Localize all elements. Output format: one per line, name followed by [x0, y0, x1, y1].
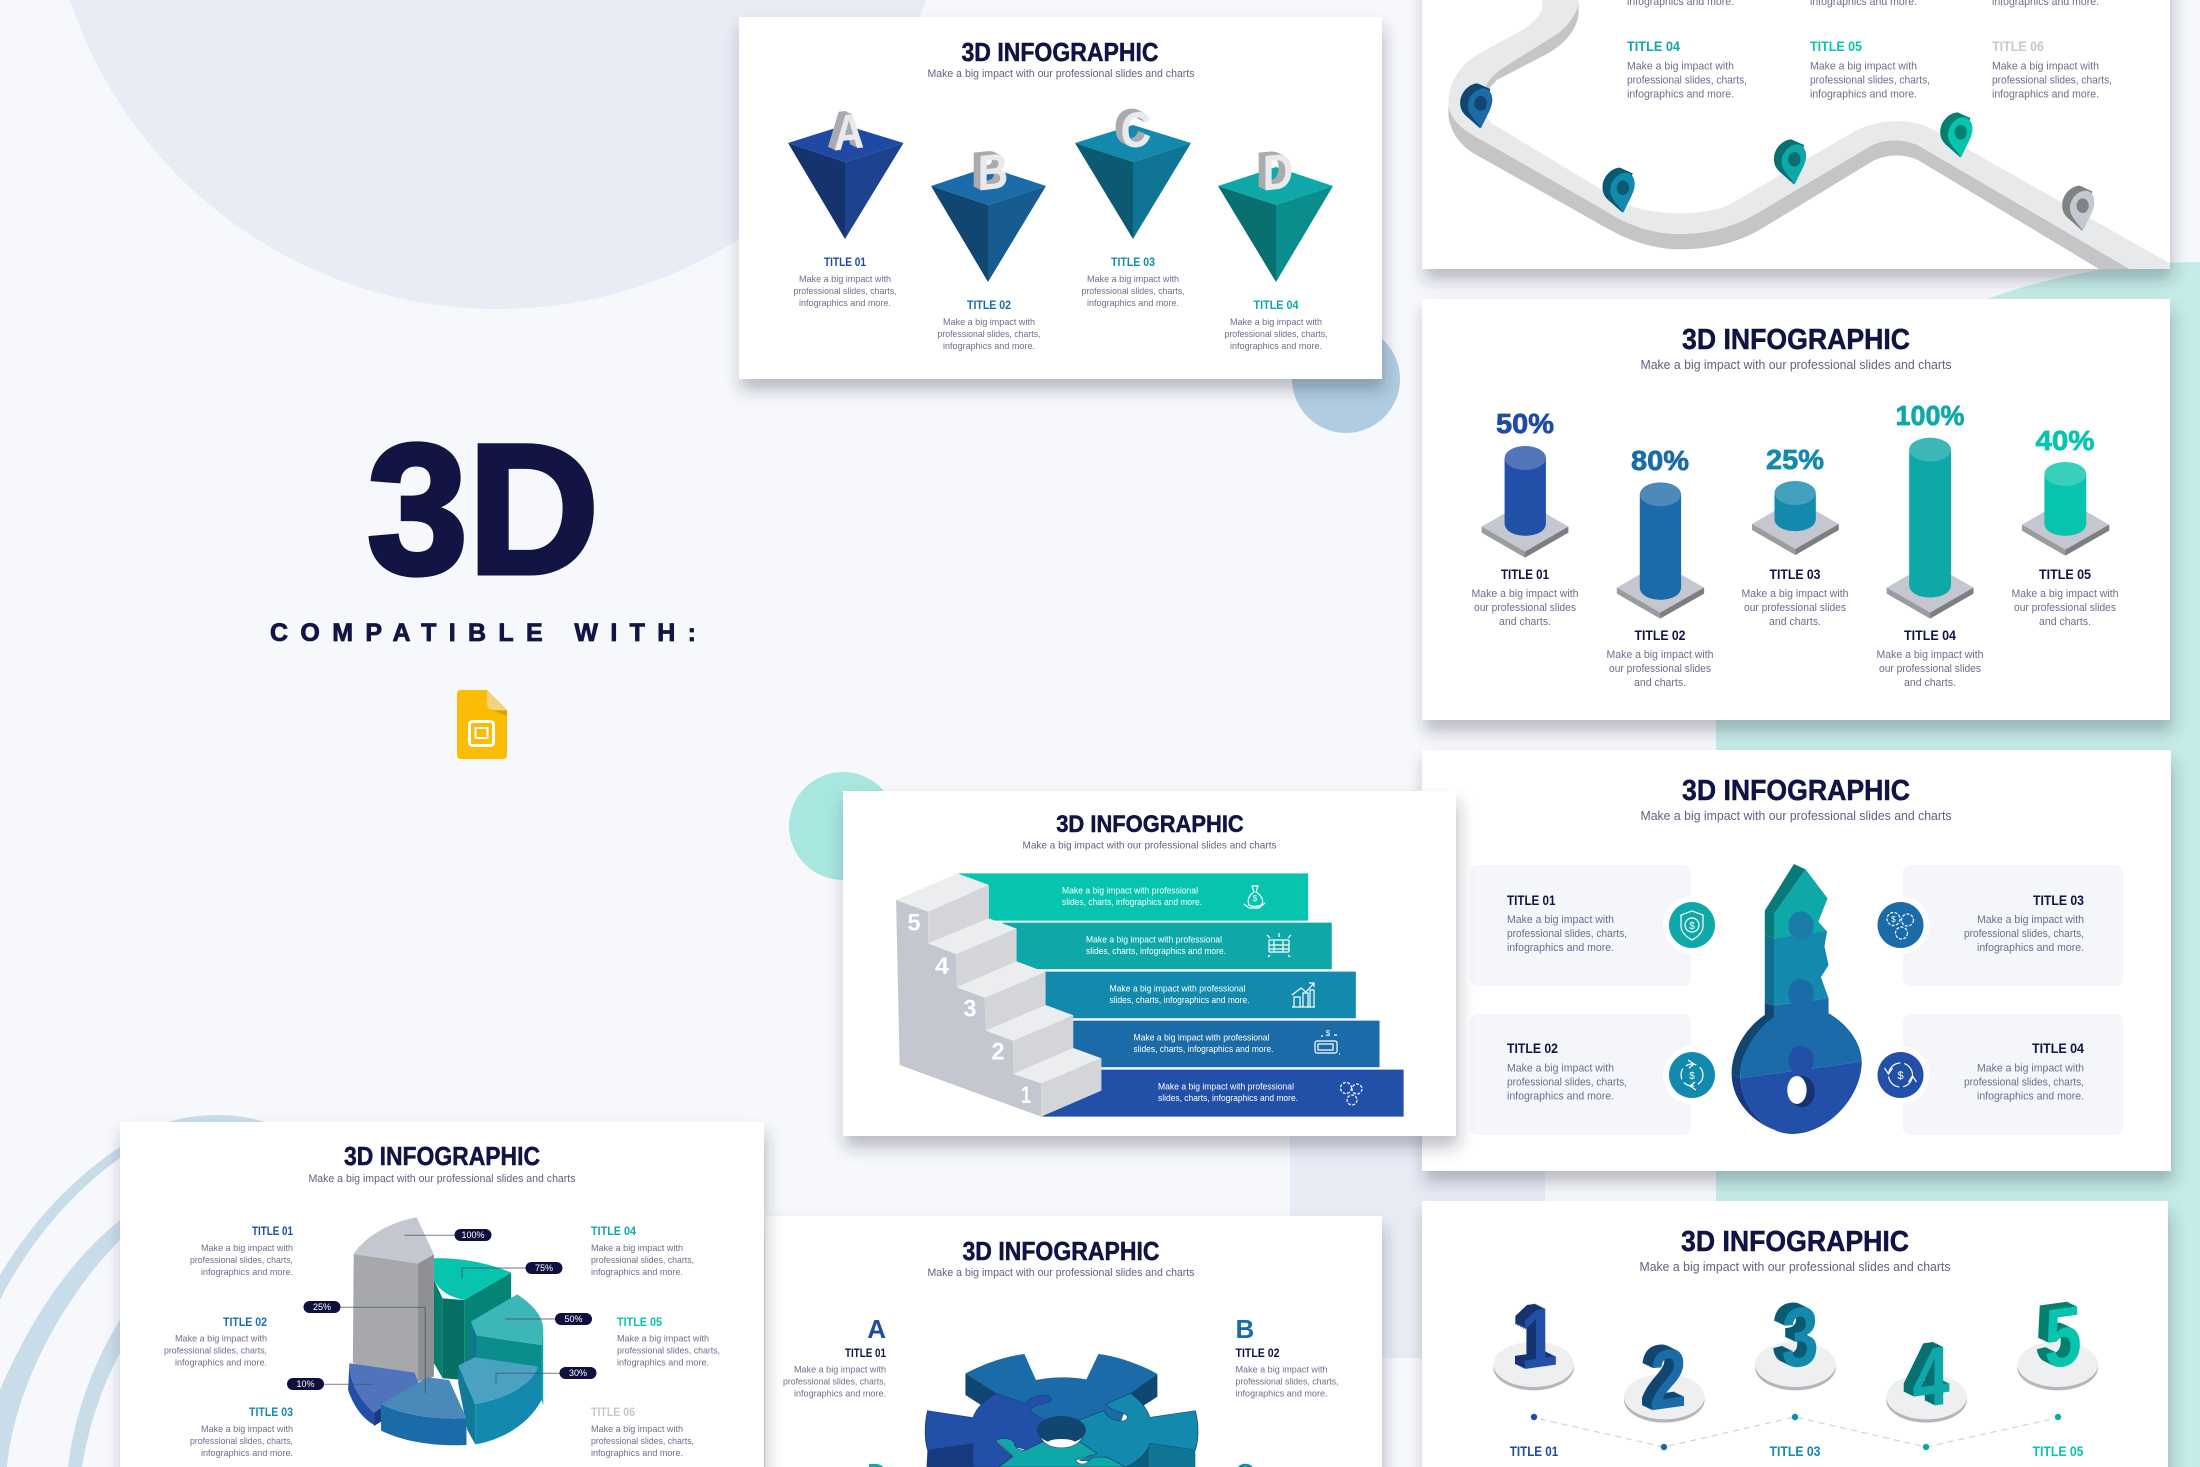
step numbers: 4	[935, 953, 950, 980]
segment: dark blue	[348, 1363, 419, 1426]
text: title 03	[1082, 255, 1184, 309]
piece: bottom	[997, 1439, 1125, 1467]
cylinder 50%	[1482, 446, 1568, 558]
bar 5	[959, 873, 1308, 921]
text: title 03: infographics and more.	[1087, 298, 1179, 309]
bottom titles: TITLE 05	[2032, 1443, 2084, 1459]
text: title 04	[591, 1224, 694, 1278]
block A: Make a big impact with	[794, 1364, 886, 1376]
text: title 01: infographics and more.	[799, 298, 891, 309]
text: title 01: TITLE 01	[824, 255, 866, 269]
bar text 1: slides, charts, infographics and more.	[1158, 1093, 1298, 1104]
text: title 04: Make a big impact with	[1627, 60, 1734, 72]
panel: puzzle gear slide	[765, 1216, 1382, 1467]
subheading: Make a big impact with our professional slides and charts	[1022, 840, 1276, 852]
heading: 3D INFOGRAPHIC	[1682, 324, 1910, 356]
text: title 02: TITLE 02	[223, 1315, 267, 1329]
segment: gray	[353, 1217, 434, 1382]
panel: key slide	[1422, 750, 2171, 1171]
text: title 01	[794, 255, 896, 309]
text: title 05	[2012, 566, 2118, 628]
text: title 01	[1472, 566, 1578, 628]
centre hole	[1037, 1416, 1086, 1446]
percent values: 40%	[2036, 425, 2095, 456]
bar text 2	[1134, 1032, 1274, 1055]
text: title 01: TITLE 01	[1507, 892, 1556, 908]
platforms	[1493, 1342, 2098, 1423]
main title: 3D: 3D	[367, 407, 599, 613]
percent values: 80%	[1631, 445, 1689, 476]
text: title 02	[1606, 627, 1714, 689]
text: title 02: TITLE 02	[1507, 1040, 1558, 1056]
block B: TITLE 02	[1236, 1346, 1280, 1360]
text: title 05	[1810, 38, 1930, 100]
text: title 06: professional slides, charts,	[591, 1436, 694, 1447]
text: title 04: professional slides, charts,	[591, 1255, 694, 1266]
pin 3	[1774, 139, 1806, 184]
icon: gears	[1872, 896, 1930, 954]
text: title 04: infographics and more.	[591, 1267, 683, 1278]
text: title 01: professional slides, charts,	[794, 286, 896, 297]
text: title 04: Make a big impact with	[1977, 1062, 2084, 1074]
3D number 1: 1	[1520, 1288, 1558, 1388]
block A: TITLE 01	[845, 1346, 886, 1360]
subheading: Make a big impact with our professional slides and charts	[928, 68, 1195, 80]
pin 2	[1602, 168, 1635, 213]
icon: shield	[1663, 896, 1721, 954]
heading: 3D INFOGRAPHIC	[1681, 1226, 1909, 1258]
block B: Make a big impact with	[1236, 1364, 1328, 1376]
text: title 05: Make a big impact with	[2012, 588, 2118, 600]
pyramid D	[1218, 167, 1333, 282]
text: title 05: our professional slides	[2014, 602, 2116, 614]
heading: 3D INFOGRAPHIC	[962, 37, 1159, 67]
3D letter D: D	[1263, 142, 1293, 201]
bar text 3	[1110, 984, 1250, 1006]
text: title 04	[1964, 1040, 2084, 1102]
block B: professional slides, charts,	[1236, 1376, 1338, 1388]
text: title 03: TITLE 03	[2033, 892, 2084, 908]
heading: 3D INFOGRAPHIC	[1056, 811, 1244, 838]
subheading: Make a big impact with our professional slides and charts	[1640, 357, 1952, 372]
text: title 03: Make a big impact with	[1742, 588, 1848, 600]
text: title 02: Make a big impact with	[1507, 1062, 1614, 1074]
percent values: 25%	[1766, 444, 1824, 475]
text: title 01: professional slides, charts,	[190, 1255, 293, 1266]
bar text 2: slides, charts, infographics and more.	[1134, 1044, 1274, 1055]
text: title 04	[1627, 38, 1747, 100]
background shape: mint circle	[789, 772, 897, 880]
step numbers: 1	[1021, 1082, 1031, 1109]
text: title 02	[164, 1315, 267, 1368]
percent values	[1496, 400, 2095, 476]
icon: shield: $	[1689, 921, 1695, 932]
bottom titles	[1510, 1443, 2084, 1459]
3D key	[1732, 864, 1862, 1134]
text: top cropped lines	[1627, 0, 2099, 8]
bar text 1: Make a big impact with professional	[1158, 1082, 1294, 1092]
text: title 03: Make a big impact with	[201, 1424, 293, 1435]
text: title 04: TITLE 04	[1904, 627, 1956, 643]
icon: growth chart	[1292, 983, 1315, 1007]
icon: circular arrows	[1663, 1046, 1721, 1104]
text: title 03	[190, 1405, 293, 1459]
text: title 03	[1964, 892, 2084, 954]
text: title 04: infographics and more.	[1627, 88, 1734, 100]
text: title 02: professional slides, charts,	[938, 329, 1040, 340]
panel: stairs slide	[843, 791, 1456, 1136]
3D letter C: C	[1121, 100, 1151, 159]
pin 5	[2062, 186, 2094, 231]
text: title 06: Make a big impact with	[591, 1424, 683, 1435]
pin 1	[1460, 83, 1492, 128]
text: title 02: Make a big impact with	[175, 1334, 267, 1344]
panel: cylinder bars slide	[1422, 299, 2170, 720]
icon: circular arrows: $	[1689, 1071, 1695, 1082]
text: title 03: professional slides, charts,	[1082, 286, 1184, 297]
text: title 03: infographics and more.	[1977, 942, 2084, 954]
background shape: concentric rings	[0, 1115, 307, 1467]
percentage pills: 75%	[535, 1263, 553, 1273]
heading: 3D INFOGRAPHIC	[344, 1141, 540, 1171]
text: title 03: Make a big impact with	[1977, 914, 2084, 926]
text: title 04: professional slides, charts,	[1224, 329, 1328, 340]
text: title 01: TITLE 01	[1501, 566, 1549, 582]
piece: left	[925, 1393, 1051, 1467]
bar 4	[1002, 923, 1332, 969]
percentage pills: 30%	[569, 1368, 587, 1378]
text: title 05	[617, 1315, 720, 1368]
3D number 5: 5	[2044, 1287, 2082, 1387]
text: title 02	[938, 298, 1040, 352]
puzzle gear	[925, 1354, 1198, 1467]
icon: gears: $	[1891, 915, 1896, 924]
text: title 04: TITLE 04	[2032, 1040, 2084, 1056]
3D number 2: 2	[1649, 1329, 1687, 1429]
bar text 4	[1086, 934, 1226, 957]
background shape: blue circle	[1292, 325, 1400, 433]
piece: right	[1079, 1393, 1198, 1467]
percentage pills	[287, 1229, 596, 1390]
3D pie chart	[324, 1217, 560, 1445]
segment: teal	[471, 1294, 543, 1405]
leader lines	[324, 1235, 560, 1393]
text: title 01: TITLE 01	[252, 1224, 293, 1238]
stairs	[896, 873, 1101, 1117]
cylinder 80%	[1617, 482, 1704, 619]
step numbers: 2	[992, 1038, 1004, 1066]
icon: money bag	[1244, 886, 1265, 908]
icon: wallet	[1315, 1029, 1340, 1054]
text: title 01: Make a big impact with	[1472, 588, 1578, 600]
text: title 06: TITLE 06	[591, 1405, 635, 1419]
block A: professional slides, charts,	[783, 1376, 886, 1388]
text: title 03: TITLE 03	[249, 1405, 293, 1419]
text: title 06: infographics and more.	[1992, 88, 2099, 100]
text: title 05: infographics and more.	[617, 1358, 709, 1368]
bar text 4: slides, charts, infographics and more.	[1086, 946, 1226, 957]
text: title 04: our professional slides	[1879, 663, 1981, 675]
text: title 05: professional slides, charts,	[617, 1346, 720, 1356]
percent values: 100%	[1896, 400, 1965, 431]
text: title 06	[1992, 38, 2112, 100]
chart: cylinders on bases	[1482, 438, 2109, 619]
3D letter B: B	[978, 142, 1008, 201]
stair illustration and bars	[896, 873, 1404, 1117]
bar text 5: Make a big impact with professional	[1062, 886, 1198, 896]
text: title 03: TITLE 03	[1111, 255, 1155, 269]
text: title 04: infographics and more.	[1977, 1090, 2084, 1102]
text: title 04: professional slides, charts,	[1627, 74, 1747, 86]
text: title 02: our professional slides	[1609, 663, 1711, 675]
text: title 05: professional slides, charts,	[1810, 74, 1930, 86]
compatible with label: COMPATIBLE WITH:	[270, 619, 696, 647]
step numbers: 5	[908, 910, 920, 936]
text: title 05: Make a big impact with	[1810, 60, 1917, 72]
side faces	[927, 1373, 1195, 1467]
background shape: pale rectangle	[1290, 1050, 1545, 1358]
icon: wallet: $	[1326, 1029, 1331, 1038]
text: title 02: Make a big impact with	[1606, 649, 1714, 661]
percentage pills: 100%	[461, 1230, 485, 1240]
bar text 1	[1158, 1082, 1298, 1104]
subheading: Make a big impact with our professional slides and charts	[1640, 1259, 1951, 1274]
bar text 3: slides, charts, infographics and more.	[1110, 995, 1250, 1006]
text: title 05: TITLE 05	[1810, 38, 1862, 54]
cylinder 25%	[1752, 481, 1839, 555]
icon: dollar cycle: $	[1897, 1070, 1904, 1082]
bar text 2: Make a big impact with professional	[1134, 1032, 1270, 1044]
3D number 3: 3	[1781, 1287, 1819, 1387]
text: title 04: TITLE 04	[1627, 38, 1680, 54]
text: title 02	[1507, 1040, 1627, 1102]
text: title 06: Make a big impact with	[1992, 60, 2099, 72]
bar text 5	[1062, 886, 1202, 908]
text: title 04: TITLE 04	[591, 1224, 636, 1238]
cylinder 40%	[2022, 462, 2109, 556]
dashed connector with dots	[1531, 1414, 2061, 1450]
pyramid A	[788, 125, 904, 239]
text: title 02: professional slides, charts,	[1507, 1076, 1627, 1088]
cylinder 100%	[1887, 438, 1973, 619]
text: title 01: Make a big impact with	[799, 274, 891, 285]
bar 3	[1026, 972, 1356, 1018]
panel: 3D pie slide	[120, 1122, 764, 1467]
bar text 5: slides, charts, infographics and more.	[1062, 897, 1202, 908]
percent values: 50%	[1496, 408, 1554, 439]
text: title 03: professional slides, charts,	[1964, 928, 2084, 940]
step numbers	[908, 910, 1031, 1109]
text: title 06: TITLE 06	[1992, 38, 2044, 54]
piece: top	[965, 1354, 1157, 1427]
block A: infographics and more.	[794, 1388, 886, 1400]
text: title 01: and charts.	[1499, 616, 1551, 628]
text: title 04	[1224, 298, 1328, 352]
subheading: Make a big impact with our professional slides and charts	[308, 1173, 576, 1185]
text: title 02: infographics and more.	[175, 1358, 267, 1368]
text: title 04: professional slides, charts,	[1964, 1076, 2084, 1088]
percentage pills: 10%	[296, 1379, 315, 1389]
block B: B	[1236, 1314, 1254, 1344]
text: title 03	[1742, 566, 1848, 628]
text: title 01: Make a big impact with	[1507, 914, 1614, 926]
pyramid C	[1075, 125, 1191, 239]
bar text 3: Make a big impact with professional	[1110, 984, 1246, 994]
bottom titles: TITLE 03	[1770, 1443, 1821, 1459]
3D number 4: 4	[1912, 1327, 1950, 1427]
panel: route slide	[1422, 0, 2170, 269]
text: title 05: TITLE 05	[617, 1315, 662, 1329]
bar 2	[1072, 1021, 1380, 1067]
panel: pyramids slide	[739, 17, 1382, 379]
bottom titles: TITLE 01	[1510, 1443, 1558, 1459]
text: title 04: Make a big impact with	[1230, 317, 1322, 328]
icon: dollar cycle	[1872, 1046, 1930, 1104]
road with pins	[1448, 0, 2170, 269]
text: title 03: infographics and more.	[201, 1448, 293, 1459]
block B	[1236, 1314, 1338, 1400]
text: title 06	[591, 1405, 694, 1459]
text: title 03: TITLE 03	[1770, 566, 1821, 582]
text: title 02: infographics and more.	[943, 341, 1035, 352]
heading: 3D INFOGRAPHIC	[962, 1236, 1160, 1266]
text: title 01	[190, 1224, 293, 1278]
pyramid B	[931, 167, 1046, 282]
percentage pills: 25%	[313, 1302, 331, 1312]
block A: A	[867, 1314, 886, 1344]
percentage pills: 50%	[564, 1314, 583, 1324]
subheading: Make a big impact with our professional slides and charts	[1640, 808, 1952, 823]
background shape: large pale circle	[47, 0, 949, 309]
text: title 02: Make a big impact with	[943, 317, 1035, 328]
background shape: mint panel	[1716, 262, 2200, 1467]
text: title 01: Make a big impact with	[201, 1243, 293, 1254]
text: title 01	[1507, 892, 1627, 954]
text: title 03: Make a big impact with	[1087, 274, 1179, 285]
text: title 04	[1876, 627, 1984, 689]
text: title 06: professional slides, charts,	[1992, 74, 2112, 86]
text: title 01: infographics and more.	[1507, 942, 1614, 954]
text: title 02: TITLE 02	[1634, 627, 1686, 643]
icon: gears	[1340, 1082, 1362, 1105]
block A	[783, 1314, 886, 1400]
text: title 03: professional slides, charts,	[190, 1436, 293, 1447]
bar text 4: Make a big impact with professional	[1086, 934, 1222, 946]
text: title 01: infographics and more.	[201, 1267, 293, 1278]
text: title 05: Make a big impact with	[617, 1334, 709, 1344]
text: title 05: infographics and more.	[1810, 88, 1917, 100]
text: title 04: Make a big impact with	[591, 1243, 683, 1254]
text: title 04: infographics and more.	[1230, 341, 1322, 352]
text: title 02: infographics and more.	[1507, 1090, 1614, 1102]
text: title 04: TITLE 04	[1254, 298, 1299, 312]
segment: mid blue	[381, 1377, 466, 1445]
segment: green	[434, 1258, 511, 1380]
step numbers: 3	[964, 996, 976, 1022]
segment: light blue	[458, 1357, 542, 1444]
text: title 01: our professional slides	[1474, 602, 1576, 614]
bar 1	[1042, 1070, 1404, 1117]
pin 4	[1940, 112, 1972, 157]
3D letter A: A	[834, 102, 864, 161]
icon: money bag: $	[1253, 894, 1258, 903]
text: title 02: TITLE 02	[967, 298, 1011, 312]
heading: 3D INFOGRAPHIC	[1682, 775, 1910, 807]
text: title 02: and charts.	[1634, 677, 1686, 689]
text: title 03: and charts.	[1769, 616, 1821, 628]
icon: cash stack	[1267, 933, 1291, 957]
card backgrounds	[1470, 865, 2124, 1135]
text: title 02: professional slides, charts,	[164, 1346, 267, 1356]
panel: numbers slide	[1422, 1201, 2168, 1467]
icon: Google Slides file	[457, 690, 507, 759]
text: title 05: TITLE 05	[2039, 566, 2091, 582]
text: title 04: Make a big impact with	[1876, 649, 1984, 661]
block B: infographics and more.	[1236, 1388, 1328, 1400]
text: title 05: and charts.	[2039, 616, 2091, 628]
text: title 04: and charts.	[1904, 677, 1956, 689]
text: title 01: professional slides, charts,	[1507, 928, 1627, 940]
text: title 03: our professional slides	[1744, 602, 1846, 614]
text: title 06: infographics and more.	[591, 1448, 683, 1459]
subheading: Make a big impact with our professional slides and charts	[928, 1267, 1195, 1279]
